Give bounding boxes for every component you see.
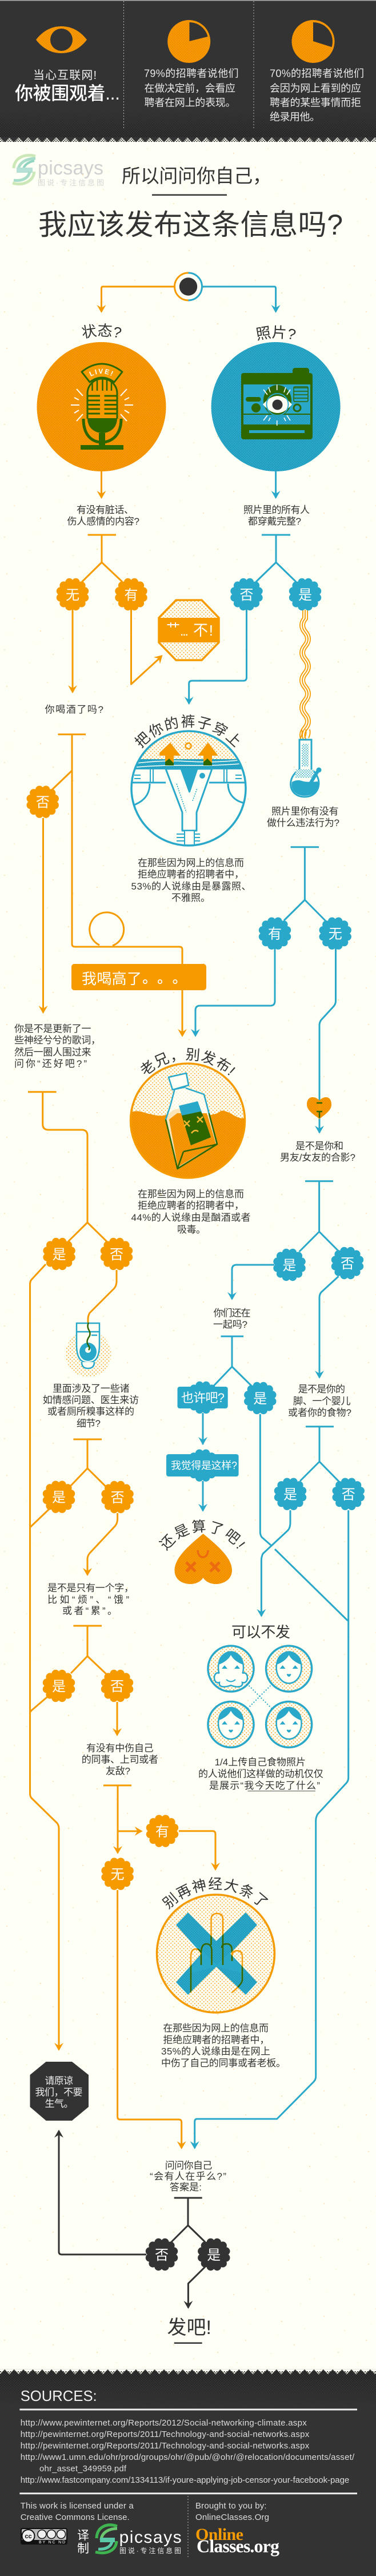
question: drunk: 你喝酒了吗? — [45, 704, 103, 715]
text: slander stat: 中伤了自己的同事或者老板。 — [161, 2058, 286, 2069]
text: food photos stat: 是展示“我今天吃了什么” — [209, 1780, 320, 1791]
question: lyrics: 你是不是更新了一 — [14, 1023, 91, 1034]
question: lyrics: 些神经兮兮的歌词， — [14, 1035, 101, 1046]
badge: food yes: 是 — [283, 1487, 297, 1503]
question: one word: 是不是只有一个字， — [47, 1583, 134, 1594]
text: alcohol stat: 在那些因为网上的信息而 — [138, 1189, 244, 1200]
badge: none: 无 — [66, 588, 79, 603]
question: one word — [47, 1583, 134, 1617]
question: foot baby food: 或者你的食物? — [288, 1407, 351, 1418]
stat text: 79% — [144, 68, 239, 109]
question: slander — [82, 1743, 158, 1777]
badge: word no — [101, 1670, 133, 1702]
text: alcohol stat: 44%的人说缘由是酗酒或者 — [131, 1212, 250, 1223]
text: exposure stat — [131, 858, 251, 903]
sources list: ohr_asset_349959.pdf — [39, 2464, 127, 2474]
flow: drunk lines — [39, 735, 187, 1037]
stat text: 70%: 绝录用他。 — [270, 111, 320, 122]
pie chart: 79% — [167, 20, 210, 63]
heading: photo: 照片? — [256, 325, 296, 341]
sources list: http://www.pewinternet.org/Reports/2012/Social-networking-climate.aspx — [21, 2418, 307, 2428]
icon: creative commons badge: BY NC ND — [39, 2541, 65, 2545]
stop sign: please forgive — [30, 2062, 89, 2121]
flow: photo branch lines — [185, 471, 296, 705]
question: together: 你们还在 — [214, 1308, 250, 1319]
badge: lyrics yes — [43, 1238, 75, 1270]
text: slander stat: 35%的人说缘由是在网上 — [161, 2046, 270, 2057]
icon: toilet — [65, 1323, 111, 1377]
flow: couple lines — [227, 1181, 338, 1379]
badge: couple no: 否 — [341, 1256, 354, 1272]
stat text: 79%: 在做决定前，会看应 — [144, 82, 235, 94]
heading: status: 状态? — [82, 323, 121, 339]
panel: header band — [0, 0, 376, 142]
question: who cares: 问问你自己 — [165, 2160, 212, 2171]
question: one word: 比如“烦”、“饿” — [47, 1594, 129, 1605]
badge: illegal none — [319, 918, 351, 950]
flow: together lines — [198, 1336, 347, 1621]
warning headline — [15, 69, 120, 104]
icon: upside-down heart face — [175, 1534, 232, 1584]
license note: This work is licensed under a — [21, 2501, 134, 2511]
badge: no drunk — [26, 786, 59, 818]
sources list: http://www.fastcompany.com/1334113/if-youre-applying-job-censor-your-facebook-page — [21, 2475, 349, 2485]
text: slander stat: 在那些因为网上的信息而 — [163, 2023, 269, 2034]
credit note — [195, 2501, 269, 2522]
text: alcohol stat: 吸毒。 — [177, 1224, 206, 1235]
logo: picsays: picsays — [38, 157, 103, 179]
title — [38, 165, 343, 241]
heading: put your pants on: 把你的裤子穿上 — [134, 714, 239, 748]
translator note: 译 — [77, 2529, 89, 2542]
question: lyrics: 问你“还好吧?” — [14, 1058, 87, 1069]
badge: food no: 否 — [342, 1487, 355, 1503]
question: who cares — [150, 2160, 226, 2193]
badge: illegal yes: 有 — [268, 927, 282, 942]
warning headline: 当心互联网! — [33, 69, 97, 82]
logo: Online Classes — [195, 2525, 279, 2557]
stop sign: 不! — [193, 622, 213, 639]
question: who cares: “会有人在乎么?” — [150, 2171, 226, 2182]
badge: maybe: 也许吧? — [181, 1391, 225, 1405]
credit note: Brought to you by: — [195, 2501, 267, 2511]
badge: couple no — [331, 1247, 363, 1279]
icon: jeans circle — [129, 729, 249, 848]
question: profanity — [67, 505, 139, 527]
badge: lyrics yes: 是 — [53, 1247, 66, 1263]
question: illegal: 照片里你有没有 — [271, 806, 338, 817]
flow: lyrics lines — [28, 1092, 117, 2051]
stat text: 70%: 70%的招聘者说他们 — [270, 68, 364, 79]
stop sign: ... — [181, 628, 188, 638]
sources heading: SOURCES: — [21, 2387, 97, 2404]
stat text: 70%: 聘者的某些事情而拒 — [270, 97, 361, 109]
badge: lyrics no — [101, 1238, 133, 1270]
sources list: http://www1.umn.edu/ohr/prod/groups/ohr/@pub/@ohr/@relocation/documents/asset/ — [21, 2452, 355, 2462]
badge: final yes: 是 — [207, 2248, 221, 2263]
translator note — [77, 2529, 89, 2555]
icon: creative commons badge: cc — [25, 2533, 32, 2540]
question: illegal — [267, 806, 339, 828]
question: foot baby food: 脚、一个婴儿 — [293, 1396, 351, 1407]
question: profanity: 伤人感情的内容? — [67, 516, 139, 527]
logo: picsays: 图说·专注信息图 — [38, 178, 104, 187]
badge: couple yes — [273, 1249, 306, 1281]
text: food photos stat: 1/4上传自己食物照片 — [215, 1757, 306, 1768]
text: exposure stat: 在那些因为网上的信息而 — [138, 858, 244, 868]
question: together — [213, 1308, 250, 1330]
icon: small heart on line — [307, 1097, 331, 1119]
logo: picsays footer: 图说·专注信息图 — [119, 2546, 181, 2555]
badge: illegal none: 无 — [329, 927, 342, 942]
question: slander: 的同事、上司或者 — [82, 1755, 158, 1765]
badge: slander none — [101, 1858, 134, 1890]
title: 所以问问你自己， — [122, 165, 271, 186]
stop sign: please forgive: 我们，不要 — [35, 2087, 82, 2098]
text: exposure stat: 53%的人说缘由是暴露照、 — [131, 881, 251, 892]
icon: four faces — [208, 1646, 312, 1747]
icon: flask — [291, 729, 321, 797]
flow: food lines — [190, 1427, 349, 2149]
flow: slander lines — [103, 1785, 220, 2149]
icon: crossed fingers circle — [157, 1895, 274, 2013]
question: slander: 友敌? — [106, 1766, 130, 1777]
badge: details no — [101, 1481, 134, 1513]
badge: maybe — [177, 1382, 228, 1414]
heading: dude do not post: 老兄，别发布! — [141, 1048, 235, 1075]
license note — [21, 2501, 134, 2522]
callout: I am drunk: 我喝高了 — [82, 970, 142, 987]
sources list — [21, 2418, 355, 2485]
callout: I am drunk — [71, 964, 206, 990]
question: foot baby food: 是不是你的 — [298, 1384, 345, 1395]
badge: yes: 是 — [298, 588, 312, 603]
question: personal details — [43, 1383, 139, 1429]
text: alcohol stat: 拒绝应聘者的招聘者中， — [138, 1200, 244, 1211]
badge: final yes — [198, 2238, 230, 2271]
badge: no — [230, 578, 263, 610]
badge: none — [57, 578, 89, 610]
badge: yes has — [115, 578, 147, 610]
badge: yes — [289, 578, 321, 610]
flow: details lines — [30, 1439, 118, 1576]
logo: Online Classes: Online — [195, 2525, 243, 2544]
text: alcohol stat — [131, 1189, 250, 1235]
question: together: 一起吗? — [213, 1319, 247, 1330]
logo: picsays — [13, 155, 104, 187]
sources list: http://pewinternet.org/Reports/2011/Technology-and-social-networks.aspx — [21, 2441, 310, 2451]
badge: final no: 否 — [155, 2248, 169, 2263]
badge: final no — [146, 2238, 178, 2271]
question: lyrics: 然后一圈人围过来 — [14, 1047, 91, 1058]
icon: microphone circle: LIVE! — [89, 368, 113, 376]
badge: details yes: 是 — [52, 1490, 66, 1506]
question: couple photo: 是不是你和 — [295, 1141, 343, 1152]
question: slander: 有没有中伤自己 — [86, 1743, 154, 1754]
start node with two branches — [97, 273, 281, 313]
license note: Creative Commons License. — [21, 2513, 130, 2522]
stat text: 79%: 79%的招聘者说他们 — [144, 68, 239, 79]
badge: together yes: 是 — [253, 1391, 267, 1407]
badge: details yes — [43, 1480, 75, 1513]
icon: bottle circle — [129, 1063, 249, 1181]
question: lyrics — [14, 1023, 101, 1069]
badge: no drunk: 否 — [36, 795, 50, 811]
text: slander stat — [161, 2023, 286, 2069]
stop sign: 艹 — [166, 621, 180, 637]
flow: status branch lines — [68, 471, 166, 693]
stop sign: please forgive: 生气。 — [45, 2098, 73, 2109]
heading: can skip: 可以不发 — [231, 1624, 290, 1641]
badge: details no: 否 — [111, 1490, 125, 1506]
question: dressed — [243, 505, 310, 527]
badge: slander yes — [146, 1815, 178, 1847]
badge: word no: 否 — [110, 1679, 124, 1694]
badge: no: 否 — [240, 588, 254, 603]
question: dressed: 照片里的所有人 — [243, 505, 310, 515]
question: illegal: 做什么违法行为? — [267, 817, 339, 828]
badge: yes has: 有 — [125, 588, 138, 603]
badge: word yes — [43, 1670, 75, 1702]
logo: picsays footer: picsays — [119, 2528, 182, 2547]
question: couple photo: 男友/女友的合影? — [280, 1152, 355, 1163]
badge: slander none: 无 — [111, 1867, 125, 1883]
badge: food yes — [274, 1478, 306, 1510]
panel: footer — [0, 2369, 376, 2576]
text: slander stat: 拒绝应聘者的招聘者中， — [163, 2035, 269, 2046]
badge: together yes — [244, 1382, 276, 1414]
badge: slander yes: 有 — [155, 1824, 169, 1840]
pie chart: 70% — [291, 20, 335, 63]
heading: post it: 发吧! — [167, 2317, 211, 2339]
credit note: OnlineClasses.Org — [195, 2513, 269, 2522]
question: foot baby food — [288, 1384, 351, 1418]
icon: eye — [36, 26, 87, 53]
logo: Online Classes: Classes.org — [197, 2536, 279, 2557]
question: personal details: 细节? — [77, 1418, 101, 1429]
question: profanity: 有没有脏话、 — [77, 505, 134, 515]
question: personal details: 里面涉及了一些诸 — [53, 1383, 129, 1394]
text: food photos stat: 的人说他们这样做的动机仅仅 — [198, 1769, 323, 1780]
text: exposure stat: 拒绝应聘者的招聘者中， — [138, 869, 244, 880]
title: 我应该发布这条信息吗? — [38, 209, 343, 241]
wavy line to flask — [302, 610, 308, 742]
question: personal details: 或者厕所糗事这样的 — [47, 1406, 134, 1417]
badge: lyrics no: 否 — [110, 1247, 123, 1263]
warning headline: 你被围观着... — [15, 83, 120, 104]
heading: stop being careless: 别再神经大条了 — [162, 1876, 269, 1910]
flow: final lines — [54, 2130, 205, 2309]
stat text: 70% — [270, 68, 364, 122]
translator note: 制 — [77, 2542, 89, 2555]
flow: one word lines — [30, 1626, 122, 1736]
flow: illegal lines — [191, 847, 336, 1134]
sources list: http://pewinternet.org/Reports/2011/Technology-and-social-networks.aspx — [21, 2430, 310, 2439]
stat text: 70%: 会因为网上看到的应 — [270, 82, 361, 94]
question: couple photo — [280, 1141, 355, 1163]
question: personal details: 如情感问题、医生来访 — [43, 1395, 139, 1406]
question: one word: 或者“累”。 — [62, 1606, 117, 1617]
icon: camera circle — [211, 342, 341, 471]
badge: food no — [333, 1478, 365, 1510]
heading: forget it: 还是算了吧! — [159, 1519, 245, 1551]
badge: word yes: 是 — [52, 1679, 66, 1694]
stop sign: please forgive: 请原谅 — [45, 2075, 73, 2086]
badge: couple yes: 是 — [282, 1258, 296, 1273]
icon: microphone circle — [37, 342, 166, 471]
icon: creative commons badge — [21, 2528, 67, 2545]
logo: picsays footer — [95, 2525, 182, 2555]
question: dressed: 都穿戴完整? — [248, 516, 301, 527]
stop sign — [158, 600, 219, 660]
text: exposure stat: 不雅照。 — [171, 892, 210, 903]
text: food photos stat — [198, 1757, 323, 1792]
badge: I think so — [166, 1450, 239, 1482]
badge: I think so: 我觉得是这样? — [171, 1460, 237, 1471]
badge: illegal yes — [259, 918, 291, 950]
stat text: 79%: 聘者在网上的表现。 — [144, 97, 235, 109]
question: who cares: 答案是: — [170, 2182, 202, 2193]
